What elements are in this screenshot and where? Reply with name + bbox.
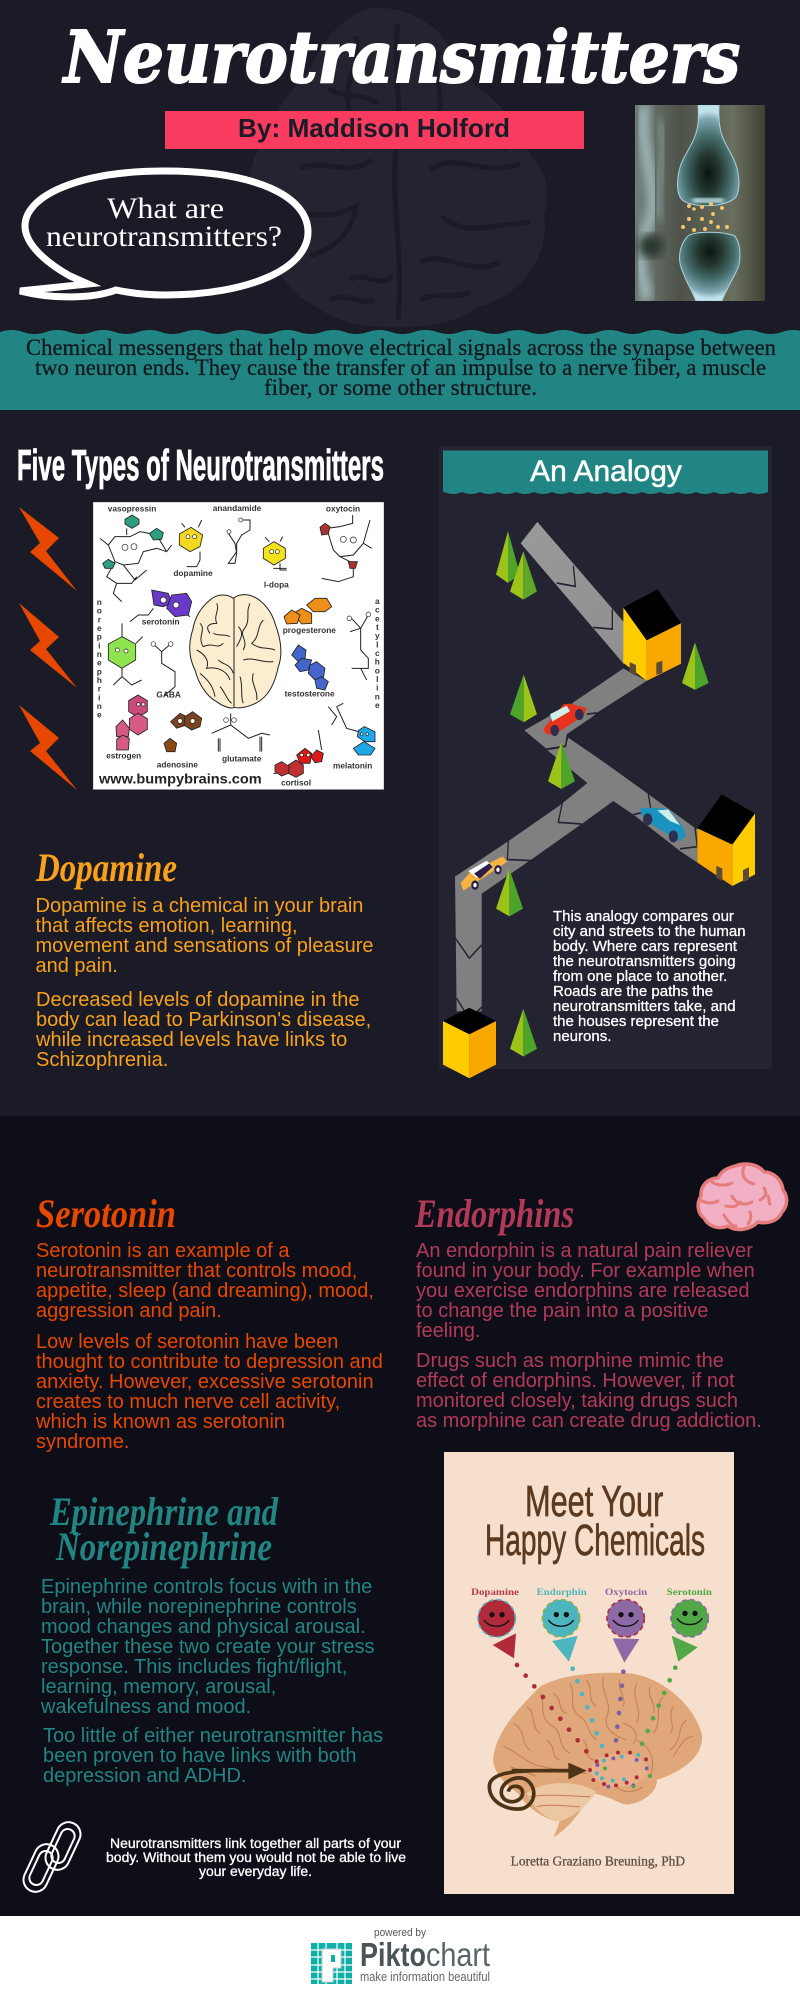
- analogy illustration: [443, 522, 755, 1078]
- title: Neurotransmitters: [62, 15, 740, 99]
- panel: serotonin: creates to much nerve cell activity,: [36, 1391, 340, 1413]
- chart: molecules image: estrogen: [106, 750, 141, 760]
- footer: piktochart logo: Pikto: [360, 1936, 426, 1973]
- book author: Loretta Graziano Breuning, PhD: [511, 1854, 685, 1869]
- text block: closing note: Neurotransmitters link together all parts of your: [110, 1836, 402, 1851]
- brain watermark: [250, 8, 547, 327]
- chemical labels: Serotonin: [667, 1587, 712, 1597]
- tree: [496, 531, 520, 583]
- panel: epinephrine and norepinephrine: mood changes and physical arousal.: [41, 1616, 366, 1638]
- chart: molecules image: acetylcholine: [375, 596, 380, 710]
- text block: closing note: [106, 1836, 406, 1879]
- dopamine pathway dots: [515, 1663, 678, 1789]
- panel: endorphins: Endorphins: [414, 1191, 574, 1236]
- panel: epinephrine and norepinephrine: learning, memory, arousal,: [41, 1676, 276, 1698]
- page background: [0, 0, 800, 1117]
- chart: molecules image: norepinephrine: [97, 597, 102, 720]
- panel: serotonin: Serotonin is an example of a: [36, 1240, 290, 1262]
- panel: endorphins: to change the pain into a positive: [416, 1300, 708, 1322]
- chart: molecules image: dopamine: [173, 568, 213, 578]
- panel: serotonin: aggression and pain.: [36, 1300, 222, 1322]
- house: bottom: [443, 1008, 496, 1078]
- chart: molecules image: anandamide: [213, 503, 262, 513]
- book title: [485, 1477, 705, 1565]
- analogy text: neurons.: [553, 1028, 611, 1045]
- chart: molecules image: cortisol: [281, 777, 311, 787]
- footer: piktochart logo: make information beautiful: [360, 1969, 490, 1984]
- panel: epinephrine and norepinephrine: Together these two create your stress: [41, 1636, 374, 1658]
- brain: [493, 1673, 702, 1837]
- chart: molecules image: glutamate: [222, 753, 262, 763]
- panel: serotonin: Serotonin: [36, 1191, 176, 1236]
- icon: logo mark: [311, 1943, 352, 1984]
- panel: serotonin: anxiety. However, excessive serotonin: [36, 1371, 374, 1393]
- panel: dopamine: while increased levels have links to: [35, 1029, 347, 1051]
- panel: serotonin: [35, 1191, 383, 1453]
- car: red: [543, 704, 587, 736]
- panel: serotonin: neurotransmitter that controls mood,: [36, 1260, 357, 1282]
- tree: [548, 742, 575, 789]
- chart: molecules image: vasopressin: [108, 504, 156, 514]
- panel: dopamine: Dopamine: [35, 845, 177, 890]
- chart: molecules image: GABA: [156, 690, 181, 700]
- panel: endorphins: you exercise endorphins are released: [416, 1280, 750, 1302]
- panel: serotonin: appetite, sleep (and dreaming), mood,: [36, 1280, 374, 1302]
- chart: molecules image: l-dopa: [264, 580, 289, 590]
- analogy text: the houses represent the: [553, 1013, 719, 1030]
- panel: endorphins: effect of endorphins. However, if not: [416, 1370, 735, 1392]
- chart: molecules image: [93, 502, 384, 789]
- tree: [510, 674, 537, 722]
- panel: serotonin: thought to contribute to depression and: [36, 1351, 383, 1373]
- text block: closing note: body. Without them you would not be able to live: [106, 1850, 406, 1865]
- icon: synapse photo: [635, 105, 765, 301]
- panel: endorphins: as morphine can create drug addiction.: [416, 1410, 762, 1432]
- panel: definition band: Chemical messengers that help move electrical signals across the synapse between: [26, 335, 776, 360]
- speech bubble: [20, 171, 308, 297]
- panel: dopamine: movement and sensations of pleasure: [36, 935, 373, 957]
- panel: endorphins: feeling.: [416, 1320, 480, 1342]
- spiral arrow: [489, 1763, 587, 1809]
- analogy header: [443, 450, 768, 494]
- happy faces: [478, 1600, 708, 1663]
- icon: chain link: [20, 1818, 84, 1896]
- author banner: By: Maddison Holford: [238, 113, 510, 143]
- analogy text: This analogy compares our: [553, 908, 734, 925]
- panel: serotonin: syndrome.: [36, 1431, 129, 1453]
- road: upper: [521, 522, 624, 664]
- author banner: [165, 111, 584, 149]
- panel: dopamine: Schizophrenia.: [36, 1049, 168, 1071]
- panel: endorphins: monitored closely, taking drugs such: [416, 1390, 738, 1412]
- panel: endorphins: [414, 1191, 762, 1432]
- panel: epinephrine and norepinephrine: Epinephrine controls focus with in the: [41, 1576, 372, 1598]
- panel: dopamine: Decreased levels of dopamine in the: [36, 989, 360, 1011]
- speech bubble: What are: [107, 192, 224, 225]
- footer: piktochart logo: chart: [426, 1936, 490, 1973]
- analogy text: Roads are the paths the: [553, 983, 713, 1000]
- chemical labels: [471, 1587, 712, 1597]
- text block: closing note: your everyday life.: [199, 1864, 312, 1879]
- panel: endorphins: An endorphin is a natural pain reliever: [416, 1240, 753, 1262]
- chemical labels: Dopamine: [471, 1587, 519, 1597]
- car: taxi: [461, 856, 507, 891]
- speech bubble: neurotransmitters?: [46, 220, 282, 253]
- panel: dopamine: that affects emotion, learning,: [36, 915, 298, 937]
- analogy heading: An Analogy: [530, 455, 682, 488]
- road: middle: [455, 668, 697, 1012]
- chart: molecules image: oxytocin: [326, 504, 360, 514]
- panel: epinephrine and norepinephrine: Norepinephrine: [55, 1524, 272, 1569]
- panel: epinephrine and norepinephrine: wakefulness and mood.: [40, 1696, 251, 1718]
- panel: epinephrine and norepinephrine: [40, 1489, 383, 1787]
- analogy text: from one place to another.: [553, 968, 727, 985]
- panel: endorphins: Drugs such as morphine mimic the: [416, 1350, 724, 1372]
- analogy text: body. Where cars represent: [553, 938, 738, 955]
- icon: book cover: [444, 1452, 734, 1894]
- panel: dopamine: Dopamine is a chemical in your brain: [36, 895, 363, 917]
- chart: molecules image: progesterone: [283, 625, 336, 635]
- panel: endorphins: found in your body. For example when: [416, 1260, 755, 1282]
- panel: serotonin: which is known as serotonin: [35, 1411, 285, 1433]
- molecule: coloured rings: [103, 515, 375, 777]
- footer: piktochart logo: powered by: [374, 1927, 426, 1939]
- house: right: [697, 795, 755, 886]
- panel: dopamine: and pain.: [36, 955, 118, 977]
- panel: epinephrine and norepinephrine: Epinephrine and: [49, 1489, 279, 1534]
- icon: lightning bolts: [19, 507, 77, 790]
- footer: piktochart logo: [311, 1927, 490, 1984]
- panel: definition band: fiber, or some other structure.: [264, 375, 537, 400]
- panel: dopamine: [35, 845, 373, 1071]
- panel: epinephrine and norepinephrine: brain, while norepinephrine controls: [41, 1596, 357, 1618]
- analogy text: [553, 908, 746, 1045]
- chart: molecules image: testosterone: [285, 689, 335, 699]
- book title: Meet Your: [525, 1477, 663, 1526]
- lower section background: [0, 1116, 800, 1917]
- panel: serotonin: Low levels of serotonin have been: [36, 1331, 338, 1353]
- analogy text: the neurotransmitters going: [553, 953, 736, 970]
- tree: [510, 1009, 537, 1056]
- panel: epinephrine and norepinephrine: Too little of either neurotransmitter has: [43, 1725, 383, 1747]
- footer background: [0, 1916, 800, 1996]
- chart: molecules image: www.bumpybrains.com: [98, 770, 262, 786]
- molecule: skeleton lines: [100, 515, 372, 773]
- heading: five types: Five Types of Neurotransmitters: [17, 441, 384, 490]
- house: top: [623, 589, 681, 681]
- analogy text: neurotransmitters take, and: [553, 998, 736, 1015]
- panel: definition band: [0, 330, 800, 410]
- panel: epinephrine and norepinephrine: depression and ADHD.: [43, 1765, 246, 1787]
- icon: pink brain: [698, 1164, 787, 1229]
- chart: molecules image: serotonin: [142, 617, 180, 627]
- panel: dopamine: body can lead to Parkinson's disease,: [36, 1009, 371, 1031]
- car: blue: [639, 808, 686, 842]
- panel: epinephrine and norepinephrine: been proven to have links with both: [43, 1745, 357, 1767]
- panel: epinephrine and norepinephrine: response. This includes fight/flight,: [41, 1656, 347, 1678]
- chemical labels: Oxytocin: [605, 1587, 647, 1597]
- molecule: eyes: [115, 518, 371, 757]
- tree: [496, 869, 523, 916]
- chart: molecules image: adenosine: [157, 759, 198, 769]
- panel: definition band: two neuron ends. They cause the transfer of an impulse to a nerve fiber, a muscle: [35, 355, 766, 380]
- tree: [510, 551, 537, 600]
- analogy text: city and streets to the human: [553, 923, 746, 940]
- icon: central brain: [190, 595, 281, 708]
- chart: molecules image: melatonin: [333, 760, 372, 770]
- panel: an analogy: [439, 446, 772, 1078]
- tree: [682, 642, 709, 690]
- chemical labels: Endorphin: [537, 1587, 587, 1597]
